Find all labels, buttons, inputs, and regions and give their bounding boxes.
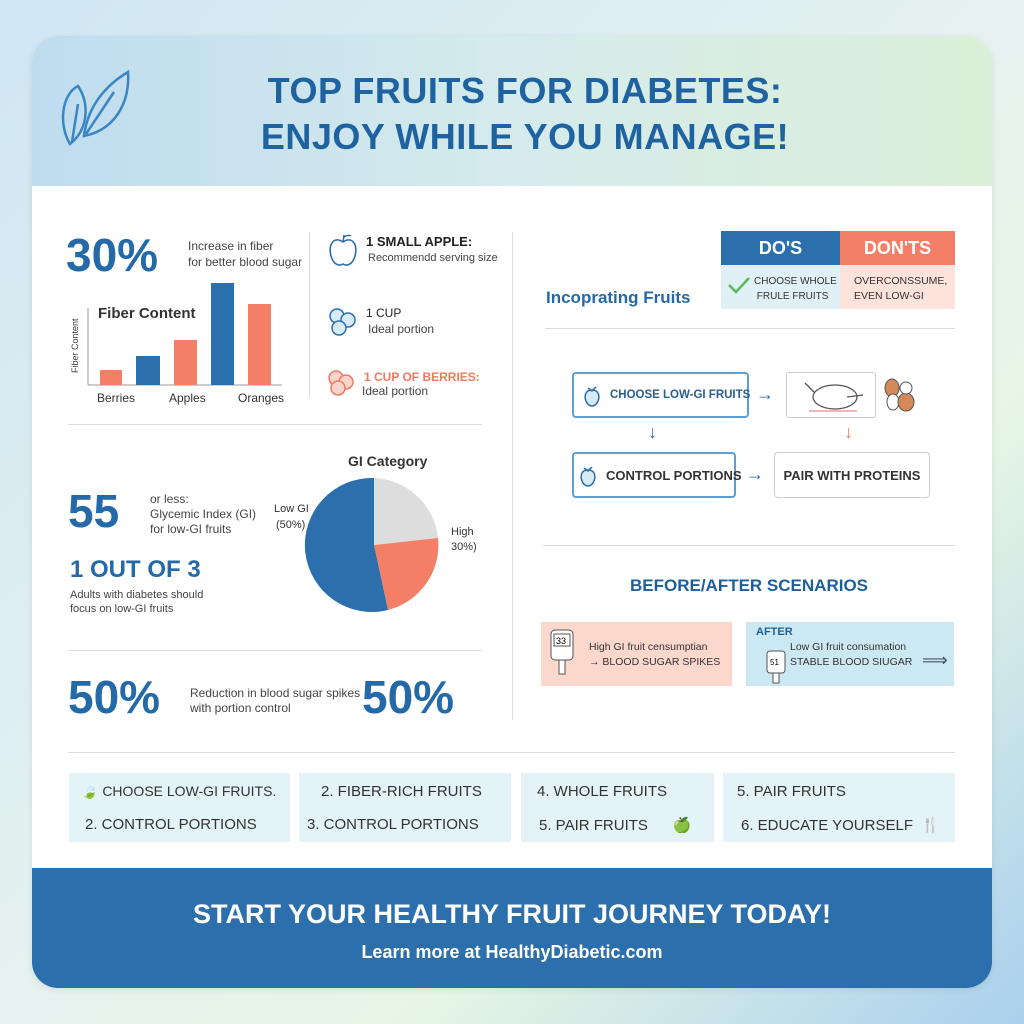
serving list: 1 CUP [366, 306, 401, 320]
stat: 55: for low-GI fruits [150, 522, 231, 536]
serving list: 1 SMALL APPLE: [366, 234, 472, 249]
stat: 1 out of 3: Adults with diabetes should [70, 589, 203, 601]
icon: berries [328, 370, 354, 396]
do's and don'ts table: FRULE FRUITS [757, 291, 828, 302]
flow: control portions [572, 452, 736, 498]
arrow down: ↓ [648, 422, 657, 442]
serving list: Ideal portion [368, 322, 434, 336]
tip card 1 [69, 773, 290, 842]
tip card 2 [299, 773, 511, 842]
after box: 51 [770, 658, 779, 667]
serving list [328, 234, 498, 398]
do's and don'ts table: DON'TS [864, 238, 931, 258]
header [32, 36, 992, 186]
flow: control portions: CONTROL PORTIONS [606, 468, 742, 482]
tip card 4 [723, 773, 955, 842]
before box [541, 622, 732, 686]
do's and don'ts table [721, 231, 955, 309]
serving list: Ideal portion [362, 384, 428, 398]
after box: STABLE BLOOD SIUGAR [790, 656, 912, 668]
after box: AFTER [756, 626, 793, 638]
icon: nuts [884, 378, 914, 412]
footer link: Learn more at HealthyDiabetic.com [361, 942, 663, 962]
pie chart: GI category: Low GI [274, 503, 309, 515]
pie chart: GI category [274, 453, 477, 612]
tip card 2: 2. FIBER-RICH FRUITS [321, 783, 482, 800]
tip card 3 [521, 773, 714, 842]
bar chart: fiber content [70, 283, 284, 405]
arrow: → [746, 464, 764, 484]
tip card 3: 5. PAIR FRUITS 🍏 [539, 817, 692, 834]
bar chart: fiber content: Fiber Content [98, 305, 196, 322]
stat: 1 out of 3: focus on low-GI fruits [70, 603, 173, 615]
bar chart: fiber content: Apples [169, 391, 206, 405]
stat: 30%: for better blood sugar [188, 255, 302, 269]
stat: 50%: 50% [362, 671, 454, 723]
tip card 1: 🍃 CHOOSE LOW-GI FRUITS. [81, 783, 276, 799]
serving list: 1 CUP OF BERRIES: [364, 370, 480, 384]
stat: 50%: Reduction in blood sugar spikes [190, 686, 360, 700]
pie chart: GI category: High [451, 526, 474, 538]
stat: 30% [66, 229, 302, 281]
heading: before/after: BEFORE/AFTER SCENARIOS [630, 576, 868, 595]
tips row [69, 773, 955, 842]
bar chart: fiber content: Fiber Content [70, 318, 80, 373]
flow: pair with proteins: PAIR WITH PROTEINS [784, 468, 920, 482]
stat: 1 out of 3 [70, 556, 203, 615]
arrow down red: ↓ [844, 422, 853, 442]
stat: 55 [68, 485, 256, 537]
stat: 50%: 50% [68, 671, 160, 723]
footer [32, 868, 992, 988]
flow: choose low-gi [572, 372, 749, 418]
icon: leaves [62, 70, 130, 146]
stat: 55: or less: [150, 492, 189, 506]
after box: Low GI fruit consumation [790, 641, 906, 653]
flow: choose low-gi: CHOOSE LOW-GI FRUITS [610, 389, 750, 401]
title [261, 70, 789, 157]
do's and don'ts table: OVERCONSSUME, [854, 275, 947, 287]
stat: 1 out of 3: 1 OUT OF 3 [70, 556, 201, 583]
title: TOP FRUITS FOR DIABETES: [268, 70, 782, 111]
icon: blueberries [329, 308, 356, 336]
before box: 33 [556, 636, 566, 646]
arrow: → [756, 384, 774, 404]
stat: 30%: 30% [66, 229, 158, 281]
after box: ⟹ [922, 650, 948, 670]
after box [746, 622, 954, 686]
flow diagram [572, 372, 930, 498]
tip card 2: 3. CONTROL PORTIONS [307, 816, 479, 833]
serving list: Recommendd serving size [368, 252, 498, 264]
tip card 4: 6. EDUCATE YOURSELF 🍴 [741, 817, 940, 834]
flow: protein image [786, 372, 876, 418]
before box: → BLOOD SUGAR SPIKES [589, 656, 720, 668]
stat: 50% [68, 671, 454, 723]
title: ENJOY WHILE YOU MANAGE! [261, 116, 789, 157]
bar chart: fiber content: Oranges [238, 391, 284, 405]
do's and don'ts table: EVEN LOW-GI [854, 290, 924, 302]
stat: 55: Glycemic Index (GI) [150, 507, 256, 521]
before box: High GI fruit censumptian [589, 641, 707, 653]
do's and don'ts table: DO'S [759, 238, 802, 258]
bar chart: fiber content: Berries [97, 391, 135, 405]
tip card 1: 2. CONTROL PORTIONS [85, 816, 257, 833]
do's and don'ts table: CHOOSE WHOLE [754, 276, 837, 287]
tip card 3: 4. WHOLE FRUITS [537, 783, 667, 800]
tip card 4: 5. PAIR FRUITS [737, 783, 846, 800]
stat: 50%: with portion control [190, 701, 291, 715]
flow: pair with proteins [774, 452, 930, 498]
icon: apple [329, 234, 357, 266]
heading: incorporating fruits: Incoprating Fruits [546, 288, 690, 307]
pie chart: GI category: (50%) [276, 519, 305, 531]
stat: 30%: Increase in fiber [188, 239, 273, 253]
footer heading: START YOUR HEALTHY FRUIT JOURNEY TODAY! [193, 899, 831, 929]
stat: 55: 55 [68, 485, 119, 537]
pie chart: GI category: GI Category [348, 453, 428, 469]
pie chart: GI category: 30%) [451, 541, 477, 553]
